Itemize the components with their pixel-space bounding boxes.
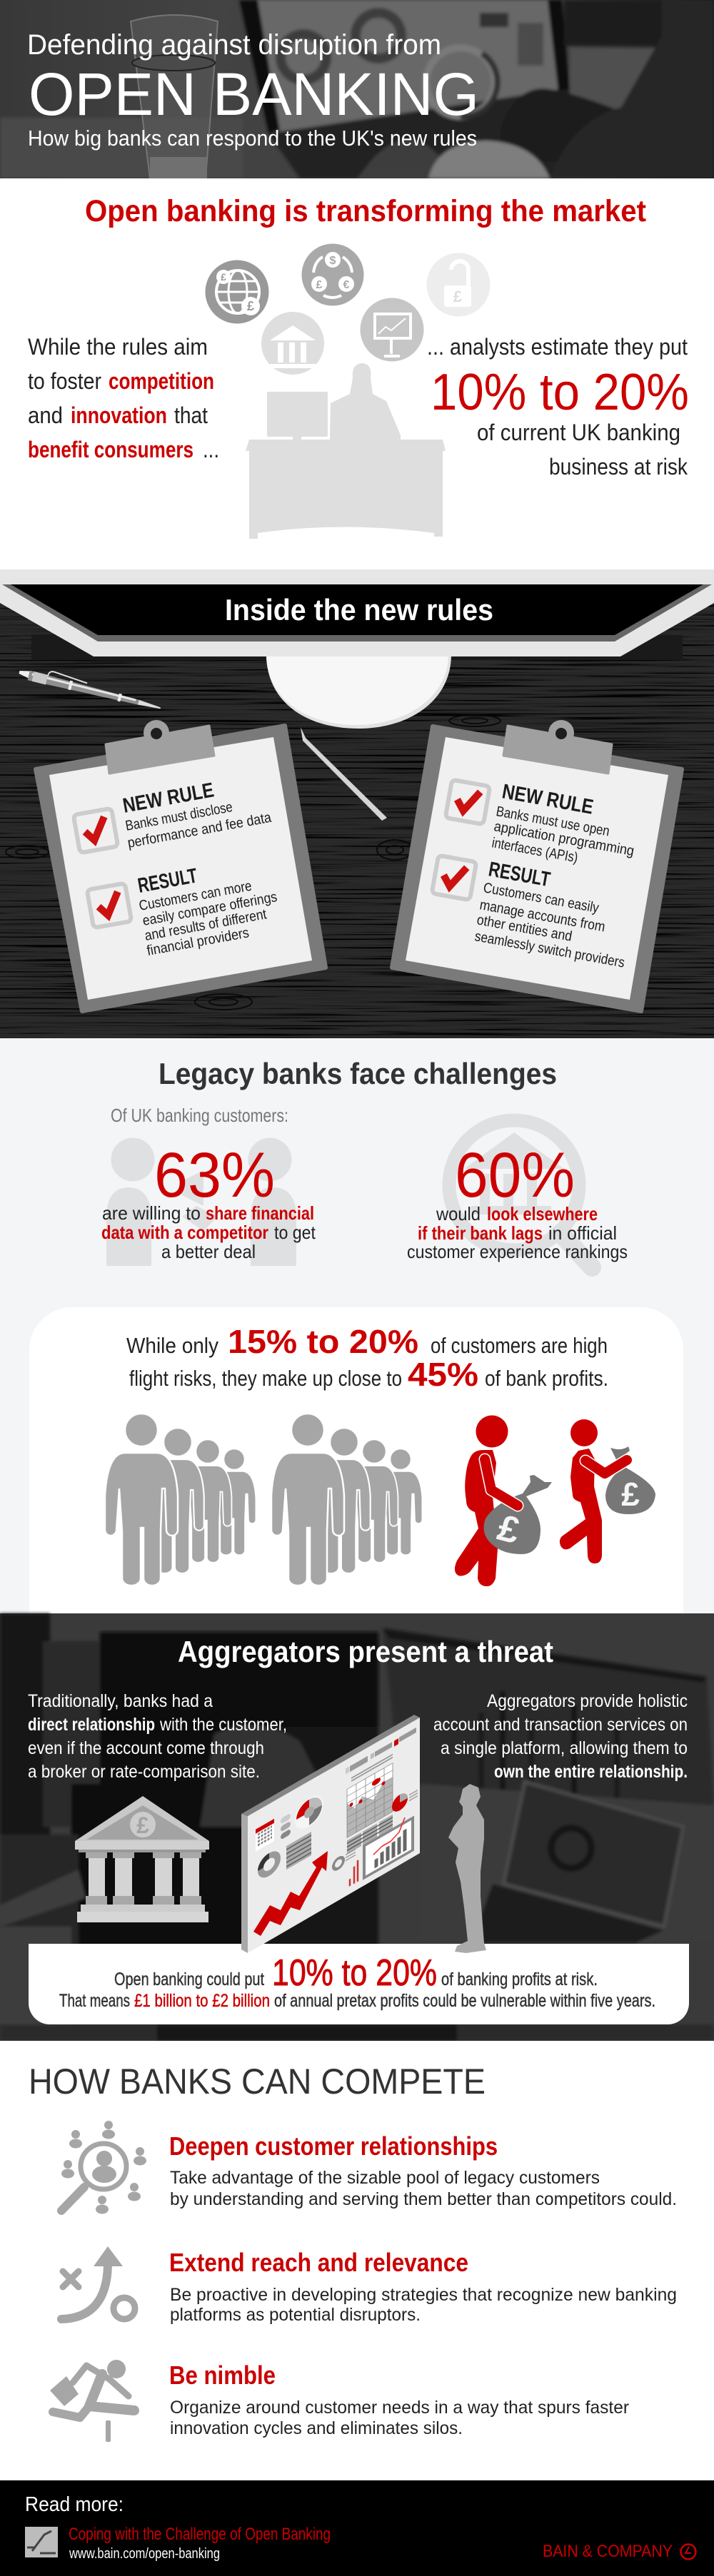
- checkbox: [446, 780, 490, 824]
- text: extend reach: Be proactive in developing strategies that recognize new banking: [170, 2285, 677, 2305]
- text: aggregator services: Aggregators provide holistic: [487, 1691, 688, 1711]
- text: traditional relationship: direct relationship: [28, 1715, 155, 1735]
- link: report title: Coping with the Challenge of Open Banking: [69, 2525, 331, 2544]
- water glass: [131, 15, 218, 178]
- heading: inside the new rules: Inside the new rules: [225, 593, 493, 627]
- text: new rule right: NEW RULE: [501, 780, 595, 819]
- text: result right: Customers can easily: [482, 880, 600, 916]
- text: be nimble: [169, 2361, 629, 2438]
- heading: aggregators: Aggregators present a threat: [178, 1635, 553, 1668]
- text: traditional relationship: Traditionally, banks had a: [28, 1691, 213, 1711]
- text: profits at risk: of banking profits at risk.: [441, 1969, 598, 1989]
- card: flight risks: [29, 1307, 683, 1613]
- header photo: laptop on desk: [0, 0, 714, 178]
- text: look elsewhere: customer experience rankings: [407, 1241, 628, 1262]
- text: new rule right: Banks must use open: [495, 803, 610, 839]
- text: look elsewhere: if their bank lags: [418, 1222, 543, 1244]
- illustration: standing person: [448, 1784, 486, 1953]
- icon: bank building: £: [136, 1812, 149, 1838]
- text: traditional relationship: [28, 1691, 287, 1782]
- text: flight risk statement: flight risks, they make up close to: [129, 1366, 402, 1391]
- text: result left: financial providers: [146, 925, 251, 959]
- clip: [106, 720, 214, 774]
- text: flight risk statement: of bank profits.: [485, 1366, 608, 1391]
- icon: strategy arrow: [61, 2246, 135, 2319]
- text: flight risk statement: While only: [126, 1333, 218, 1358]
- stat: 60 percent: 60%: [455, 1139, 575, 1210]
- checkbox: [74, 808, 118, 853]
- text: flight risk statement: [126, 1323, 608, 1393]
- header kicker: Defending against disruption from: [27, 29, 441, 61]
- text: extend reach: [169, 2248, 677, 2325]
- text: deepen relationships: [169, 2131, 677, 2209]
- text: result left: and results of different: [144, 906, 268, 944]
- icon: person walking away with money bag: [560, 1419, 655, 1563]
- dashboard widgets: [256, 1727, 418, 1940]
- text: share financial data: data with a competitor: [101, 1222, 268, 1243]
- panel: aggregators present a threat: [0, 1613, 714, 2041]
- text: deepen relationships: Take advantage of the sizable pool of legacy customers: [170, 2168, 600, 2188]
- text: traditional relationship: a broker or rate-comparison site.: [28, 1762, 260, 1782]
- text: read more: Read more:: [25, 2493, 124, 2516]
- icon: bank in magnifier: [449, 1120, 592, 1267]
- text: result left: RESULT: [136, 864, 199, 898]
- text: traditional relationship: even if the account come through: [28, 1738, 264, 1758]
- text: aggregator services: [433, 1691, 688, 1782]
- text: new rule right: interfaces (APIs): [491, 835, 579, 866]
- icon: open lock: [427, 253, 490, 317]
- text: aggregator services: account and transaction services on: [433, 1715, 688, 1735]
- text: rules aim: to foster: [28, 368, 101, 394]
- icon: currency exchange: [301, 244, 364, 305]
- illustration: person at desk: [246, 363, 446, 539]
- monitor frame: [0, 584, 714, 660]
- text: result left: Customers can more: [138, 878, 253, 914]
- wood desk background: [0, 599, 714, 1038]
- text: rules aim: [28, 334, 219, 462]
- logo: Bain and Company: BAIN & COMPANY: [543, 2542, 673, 2561]
- text: result right: seamlessly switch providers: [473, 928, 626, 971]
- monitor stand: [266, 656, 451, 729]
- icon: open lock: £: [453, 288, 463, 305]
- text: be nimble: innovation cycles and eliminates silos.: [170, 2418, 463, 2438]
- clip: [503, 720, 612, 774]
- text: profits at risk: Open banking could put: [114, 1969, 264, 1989]
- text: profits at risk: 10% to 20%: [272, 1952, 437, 1994]
- text: extend reach: Extend reach and relevance: [169, 2248, 468, 2277]
- text: aggregator services: a single platform, allowing them to: [441, 1738, 688, 1758]
- text: rules aim: innovation: [71, 402, 167, 428]
- report thumbnail: [25, 2527, 58, 2557]
- text: profits at risk: £1 billion to £2 billion: [134, 1991, 270, 2011]
- text: flight risk statement: 45%: [408, 1356, 478, 1393]
- stat: 63 percent: 63%: [154, 1139, 275, 1210]
- text: new rule left: NEW RULE: [121, 779, 216, 818]
- text: result right: other entities and: [476, 912, 573, 945]
- panel: footer: [0, 2480, 714, 2576]
- header title: OPEN BANKING: [29, 61, 479, 128]
- text: analysts estimate: business at risk: [549, 454, 688, 480]
- red rising arrow: [253, 1851, 328, 1936]
- text: flight risk statement: of customers are high: [431, 1333, 608, 1358]
- text: share financial data: to get: [274, 1222, 316, 1243]
- icon: person leaving with money bag: [455, 1416, 552, 1586]
- icon: currency exchange: £: [316, 279, 323, 291]
- illustration: dashboard board: [241, 1715, 420, 1953]
- icon: bank building: [75, 1796, 209, 1922]
- text: result left: easily compare offerings: [141, 889, 278, 929]
- panel: how banks can compete: [0, 2041, 714, 2480]
- text: result right: [473, 858, 626, 971]
- text: result right: manage accounts from: [478, 897, 606, 935]
- icon: globe and currency: [206, 260, 268, 324]
- text: traditional relationship: with the customer,: [159, 1715, 287, 1735]
- text: deepen relationships: Deepen customer relationships: [169, 2131, 498, 2161]
- icon: two people sharing: [106, 1137, 296, 1266]
- text: rules aim: While the rules aim: [28, 334, 208, 360]
- text: rules aim: competition: [109, 368, 214, 394]
- icon: group of customers: [105, 1414, 256, 1586]
- icon: currency exchange: $: [330, 255, 336, 267]
- text: result right: RESULT: [487, 858, 552, 891]
- checkbox: [432, 856, 476, 900]
- icon: globe and currency: £: [247, 299, 254, 313]
- text: share financial data: are willing to: [102, 1202, 201, 1224]
- background photo: monitors and laptop: [0, 1613, 714, 2041]
- text: rules aim: and: [28, 402, 63, 428]
- checkbox: [87, 883, 131, 928]
- clipboard: right: [392, 720, 682, 1011]
- text: look elsewhere: [407, 1203, 628, 1262]
- text: new rule left: [121, 779, 273, 851]
- text: result left: [136, 864, 278, 959]
- heading: how banks can compete: HOW BANKS CAN COMPETE: [29, 2062, 486, 2101]
- icon: presentation chart: [360, 298, 424, 361]
- panel: inside the new rules: [0, 569, 714, 1040]
- pen: [18, 664, 163, 713]
- text: new rule right: [491, 780, 635, 866]
- text: new rule right: application programming: [493, 818, 635, 859]
- text: profits at risk: [59, 1952, 655, 2011]
- pencil: [301, 727, 387, 821]
- panel: legacy banks face challenges: [0, 1038, 714, 1613]
- text: deepen relationships: by understanding and serving them better than competitors could.: [170, 2189, 677, 2209]
- text: flight risk statement: 15% to 20%: [228, 1323, 418, 1360]
- text: of UK banking customers: Of UK banking customers:: [111, 1105, 288, 1126]
- icon: globe and currency: £: [221, 271, 226, 283]
- text: look elsewhere: look elsewhere: [487, 1203, 598, 1224]
- clipboard: left: [36, 720, 326, 1011]
- link: url: www.bain.com/open-banking: [69, 2546, 220, 2562]
- icon: currency exchange: €: [343, 279, 350, 291]
- text: look elsewhere: in official: [548, 1222, 617, 1244]
- heading: transforming the market: Open banking is transforming the market: [85, 194, 646, 228]
- header subtitle: How big banks can respond to the UK's new rules: [28, 126, 477, 151]
- icon: customer magnifier: [61, 2121, 146, 2214]
- icon: hurdling runner: [50, 2360, 134, 2442]
- header panel: [0, 0, 714, 178]
- text: analysts estimate: of current UK banking: [477, 420, 680, 445]
- text: analysts estimate: [427, 334, 689, 480]
- text: look elsewhere: would: [436, 1203, 481, 1224]
- text: be nimble: Organize around customer needs in a way that spurs faster: [170, 2398, 629, 2418]
- icon: person leaving with money bag: £: [493, 1507, 524, 1552]
- text: analysts estimate: 10% to 20%: [431, 364, 689, 421]
- white callout: [29, 1944, 689, 2024]
- text: rules aim: benefit consumers: [28, 437, 193, 462]
- text: extend reach: platforms as potential disruptors.: [170, 2305, 421, 2325]
- text: profits at risk: That means: [59, 1991, 130, 2011]
- icon: person walking away with money bag: £: [621, 1476, 640, 1513]
- text: new rule left: performance and fee data: [126, 810, 273, 851]
- icon: group of customers: [271, 1414, 422, 1586]
- heading: legacy banks: Legacy banks face challenges: [159, 1057, 557, 1090]
- text: be nimble: Be nimble: [169, 2361, 276, 2390]
- icon: bank building: [261, 312, 324, 375]
- panel: market transformation: [0, 178, 714, 569]
- wood knots: [6, 715, 501, 1010]
- text: rules aim: that: [174, 402, 208, 428]
- text: analysts estimate: ... analysts estimate they put: [427, 334, 688, 360]
- text: new rule left: Banks must disclose: [124, 799, 233, 834]
- text: share financial data: a better deal: [161, 1241, 256, 1262]
- text: rules aim: ...: [203, 437, 219, 462]
- text: share financial data: [101, 1202, 316, 1262]
- text: share financial data: share financial: [206, 1202, 314, 1224]
